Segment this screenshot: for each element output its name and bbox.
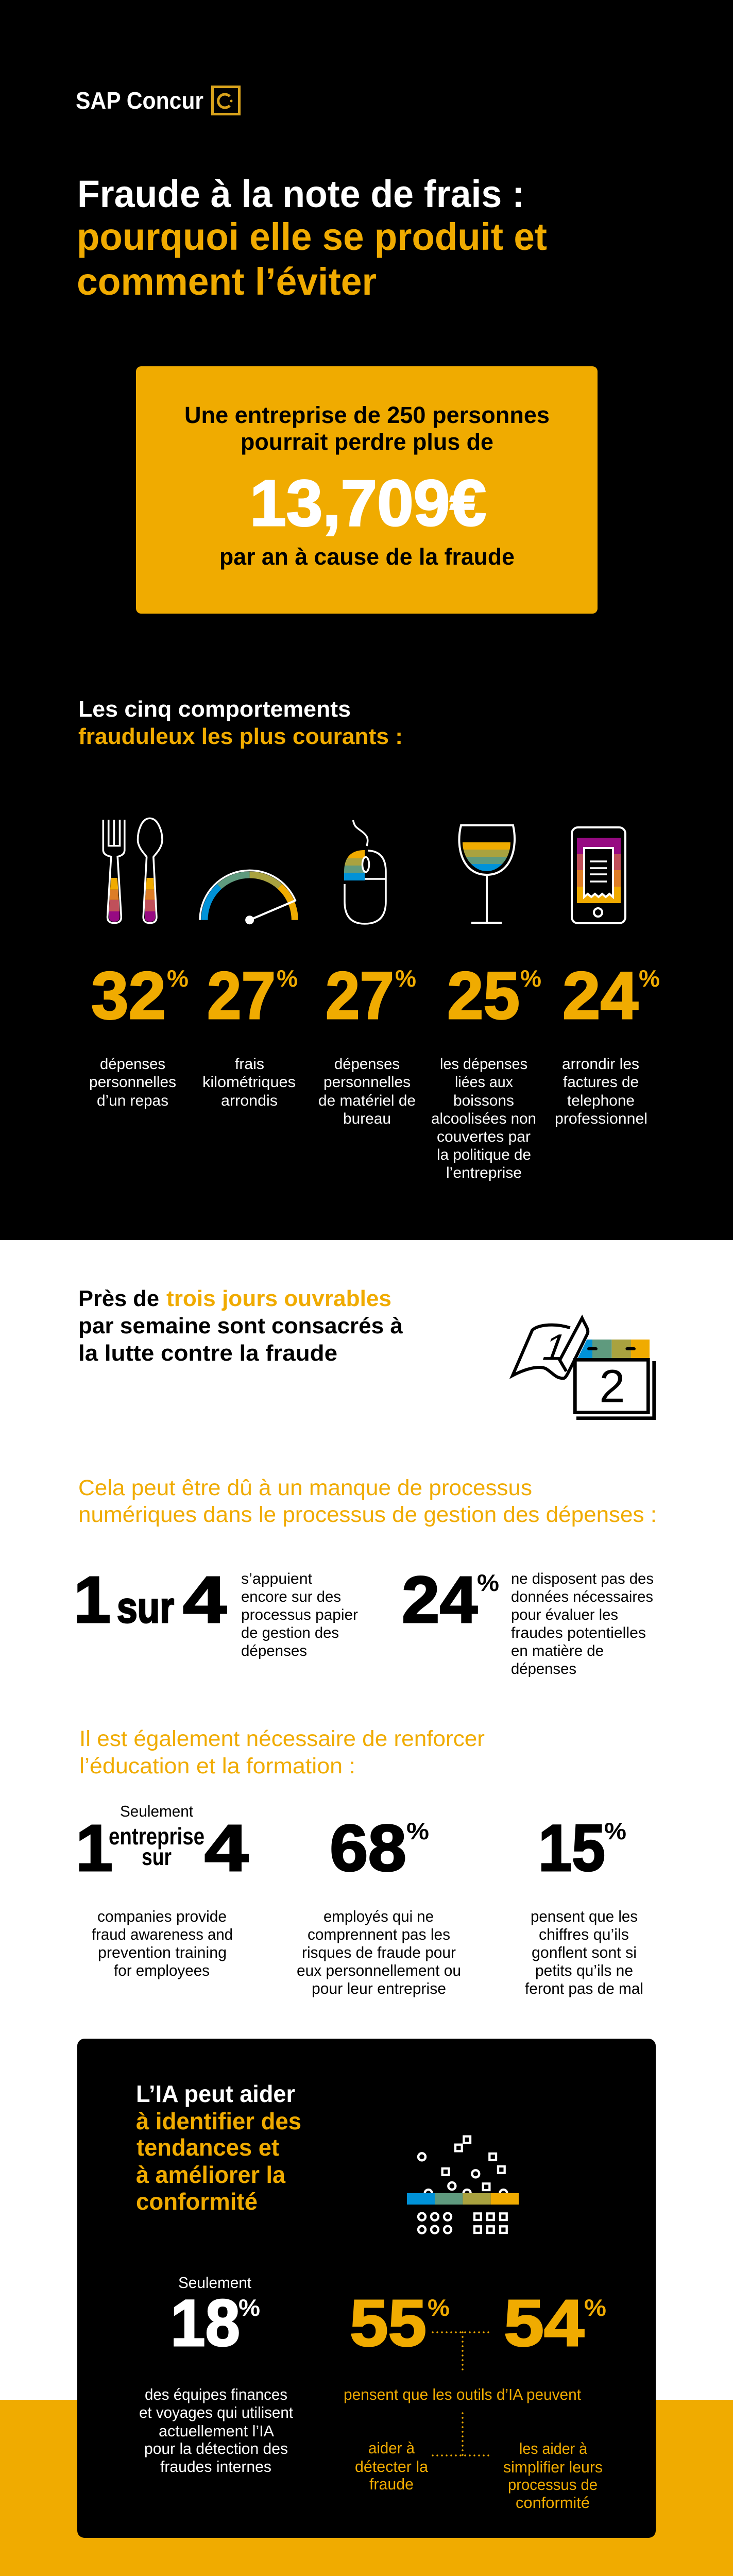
panel: hero header	[76, 86, 659, 1181]
stat: 55% and 54% with connector: 54	[504, 2286, 584, 2360]
stat: 1 sur 4 paper processes: s’appuient	[241, 1570, 313, 1587]
stat: 27% office supplies: de matériel de	[318, 1092, 416, 1109]
text: lack of digital processes: numériques dans le processus de gestion des dépenses :	[78, 1502, 657, 1527]
heading: three working days: Près de	[78, 1286, 159, 1311]
icon: wine glass	[459, 825, 515, 923]
stat: 1 entreprise sur 4: 4	[204, 1811, 248, 1885]
heading: three working days	[78, 1286, 403, 1366]
text: education and training: Il est également nécessaire de renforcer	[79, 1726, 485, 1751]
stat: 25% alcohol: les dépenses	[440, 1056, 527, 1073]
callout: cost of fraud: par an à cause de la fraude	[219, 544, 515, 570]
panel: white section	[0, 1240, 733, 2400]
stat: 32% meals: 32	[91, 958, 166, 1033]
stat: 1 entreprise sur 4: fraud awareness and	[92, 1925, 233, 1943]
stat: 15% inflate: gonflent sont si	[532, 1943, 637, 1961]
panel: AI black card	[77, 2039, 656, 2538]
stat: 15% inflate	[525, 1811, 643, 1997]
stat: 24% phone bills: telephone	[567, 1092, 635, 1109]
stat: 1 sur 4 paper processes: 1	[74, 1563, 111, 1637]
title: comment l’éviter	[77, 260, 377, 303]
stat: 32% meals	[89, 958, 189, 1109]
stat: 55% and 54% with connector: fraude	[369, 2475, 414, 2493]
callout: cost of fraud: pourrait perdre plus de	[241, 429, 493, 455]
stat: 27% office supplies: bureau	[343, 1110, 391, 1127]
stat: 24% phone bills: 24	[562, 958, 638, 1033]
stat: 55% and 54% with connector: détecter la	[355, 2458, 429, 2476]
stat: 18% finance teams: 18	[171, 2286, 240, 2360]
stat: 68% employees: comprennent pas les	[308, 1925, 450, 1943]
stat: 27% mileage: kilométriques	[202, 1074, 296, 1091]
stat: 32% meals: dépenses	[100, 1056, 165, 1073]
stat: 68% employees: %	[406, 1818, 429, 1844]
stat: 25% alcohol: boissons	[453, 1092, 514, 1109]
stat: 68% employees: pour leur entreprise	[312, 1979, 446, 1997]
heading: five behaviours	[78, 697, 403, 749]
icon: calendar	[513, 1318, 654, 1418]
stat: 27% office supplies: personnelles	[323, 1074, 411, 1091]
stat: 15% inflate: feront pas de mal	[525, 1979, 643, 1997]
icon: phone with receipt	[572, 827, 625, 923]
stat: 1 entreprise sur 4: entreprise	[109, 1823, 204, 1850]
stat: 27% mileage	[202, 958, 298, 1109]
stat: 25% alcohol	[431, 958, 541, 1181]
stat: 18% finance teams: et voyages qui utilisent	[139, 2403, 293, 2421]
callout: cost of fraud	[136, 366, 598, 614]
stat: 55% and 54% with connector: processus de	[508, 2476, 598, 2494]
text: lack of digital processes: Cela peut être dû à un manque de processus	[78, 1476, 532, 1500]
stat: 24% phone bills: arrondir les	[562, 1056, 639, 1073]
heading: AI can help: tendances et	[137, 2134, 279, 2161]
title: Fraude à la note de frais :	[77, 173, 524, 215]
text: education and training	[79, 1726, 485, 1778]
stat: 24% phone bills: professionnel	[555, 1110, 647, 1127]
stat: 27% mileage: frais	[235, 1056, 264, 1073]
icon: sorting filter	[407, 2137, 519, 2233]
stat: 68% employees: employés qui ne	[323, 1907, 434, 1925]
stat: 68% employees: risques de fraude pour	[302, 1943, 456, 1961]
stat: 55% and 54% with connector: %	[428, 2294, 450, 2321]
stat: 15% inflate: petits qu’ils ne	[535, 1961, 633, 1979]
stat: 68% employees	[297, 1811, 461, 1997]
heading: three working days: par semaine sont consacrés à	[78, 1313, 403, 1338]
stat: 18% finance teams: %	[238, 2294, 260, 2321]
stat: 25% alcohol: couvertes par	[437, 1128, 531, 1145]
heading: AI can help	[136, 2080, 301, 2215]
stat: 1 entreprise sur 4	[76, 1802, 248, 1979]
logo: SAP Concur: SAP Concur	[76, 87, 203, 114]
stat: 24% lack data	[402, 1563, 654, 1677]
stat: 55% and 54% with connector: aider à	[368, 2439, 415, 2457]
stat: 24% phone bills	[555, 958, 660, 1127]
heading: three working days: trois jours ouvrables	[166, 1286, 391, 1311]
stat: 27% office supplies	[318, 958, 416, 1127]
icon: speedometer	[200, 870, 296, 924]
stat: 27% mileage: arrondis	[221, 1092, 278, 1109]
stat: 18% finance teams: pour la détection des	[144, 2439, 288, 2458]
stat: 55% and 54% with connector: conformité	[516, 2494, 590, 2512]
heading: AI can help: à améliorer la	[136, 2161, 285, 2188]
stat: 55% and 54% with connector: %	[584, 2294, 606, 2321]
stat: 1 entreprise sur 4: 1	[76, 1811, 113, 1885]
text: lack of digital processes	[78, 1476, 657, 1527]
stat: 1 entreprise sur 4: prevention training	[98, 1943, 227, 1961]
panel: yellow section	[0, 2400, 733, 2576]
stat: 24% phone bills: factures de	[563, 1074, 639, 1091]
stat: 68% employees: 68	[330, 1811, 406, 1885]
stat: 18% finance teams: fraudes internes	[160, 2458, 271, 2476]
stat: 15% inflate: %	[604, 1818, 626, 1844]
stat: 24% lack data: ne disposent pas des	[511, 1570, 654, 1587]
icon: calendar: 1	[537, 1326, 573, 1368]
stat: 55% and 54% with connector	[344, 2286, 606, 2512]
stat: 24% lack data: données nécessaires	[511, 1588, 653, 1605]
callout: cost of fraud: 13,709€	[250, 467, 486, 539]
stat: 27% office supplies: dépenses	[334, 1056, 400, 1073]
text: education and training: l’éducation et la formation :	[79, 1754, 355, 1778]
stat: 25% alcohol: alcoolisées non	[431, 1110, 536, 1127]
stat: 25% alcohol: liées aux	[455, 1074, 513, 1091]
stat: 18% finance teams	[139, 2274, 293, 2476]
stat: 1 sur 4 paper processes: sur	[117, 1583, 174, 1632]
stat: 27% mileage: %	[277, 965, 298, 992]
icon: calendar: 2	[599, 1361, 625, 1413]
stat: 24% lack data: fraudes potentielles	[511, 1624, 646, 1641]
stat: 55% and 54% with connector: simplifier leurs	[503, 2458, 603, 2476]
stat: 24% lack data: pour évaluer les	[511, 1606, 618, 1623]
heading: AI can help: conformité	[136, 2188, 258, 2215]
stat: 25% alcohol: 25	[447, 958, 520, 1033]
stat: 24% phone bills: %	[639, 965, 660, 992]
callout: cost of fraud: Une entreprise de 250 personnes	[184, 402, 550, 428]
stat: 32% meals: personnelles	[89, 1074, 176, 1091]
heading: three working days: la lutte contre la fraude	[78, 1341, 337, 1366]
stat: 24% lack data: en matière de	[511, 1642, 604, 1659]
stat: 32% meals: d’un repas	[97, 1092, 168, 1109]
stat: 1 sur 4 paper processes: encore sur des	[241, 1588, 341, 1605]
stat: 1 sur 4 paper processes: processus papier	[241, 1606, 358, 1623]
stat: 24% lack data: dépenses	[511, 1660, 576, 1677]
heading: five behaviours: Les cinq comportements	[78, 697, 351, 722]
stat: 1 entreprise sur 4: for employees	[114, 1961, 210, 1979]
stat: 1 sur 4 paper processes	[74, 1563, 358, 1659]
heading: five behaviours: frauduleux les plus courants :	[78, 724, 403, 749]
stat: 24% lack data: %	[477, 1569, 499, 1596]
stat: 1 entreprise sur 4: sur	[142, 1843, 172, 1870]
heading: AI can help: à identifier des	[136, 2108, 301, 2134]
stat: 27% office supplies: 27	[326, 958, 394, 1033]
stat: 27% mileage: 27	[207, 958, 276, 1033]
stat: 1 sur 4 paper processes: de gestion des	[241, 1624, 339, 1641]
stat: 1 sur 4 paper processes: dépenses	[241, 1642, 307, 1659]
stat: 18% finance teams: des équipes finances	[145, 2385, 287, 2403]
stat: 25% alcohol: %	[520, 965, 541, 992]
stat: 15% inflate: 15	[538, 1811, 605, 1885]
stat: 1 entreprise sur 4: companies provide	[97, 1907, 227, 1925]
title	[77, 173, 547, 303]
stat: 25% alcohol: la politique de	[437, 1146, 531, 1163]
stat: 32% meals: %	[167, 965, 189, 992]
heading: AI can help: L’IA peut aider	[136, 2080, 295, 2107]
stat: 18% finance teams: actuellement l’IA	[159, 2422, 274, 2440]
stat: 1 sur 4 paper processes: 4	[183, 1563, 227, 1637]
icon: computer mouse	[344, 820, 386, 924]
title: pourquoi elle se produit et	[77, 215, 547, 258]
stat: 1 entreprise sur 4: Seulement	[120, 1802, 193, 1820]
stat: 55% and 54% with connector: les aider à	[519, 2439, 588, 2458]
stat: 25% alcohol: l’entreprise	[446, 1164, 522, 1181]
stat: 68% employees: eux personnellement ou	[297, 1961, 461, 1979]
stat: 24% lack data: 24	[402, 1563, 478, 1637]
stat: 18% finance teams: Seulement	[178, 2274, 251, 2292]
icon: fork and spoon	[103, 818, 162, 923]
stat: 15% inflate: pensent que les	[531, 1907, 638, 1925]
stat: 27% office supplies: %	[395, 965, 416, 992]
stat: 15% inflate: chiffres qu’ils	[539, 1925, 629, 1943]
stat: 55% and 54% with connector: 55	[350, 2286, 427, 2360]
stat: 55% and 54% with connector: pensent que les outils d’IA peuvent	[344, 2385, 581, 2403]
